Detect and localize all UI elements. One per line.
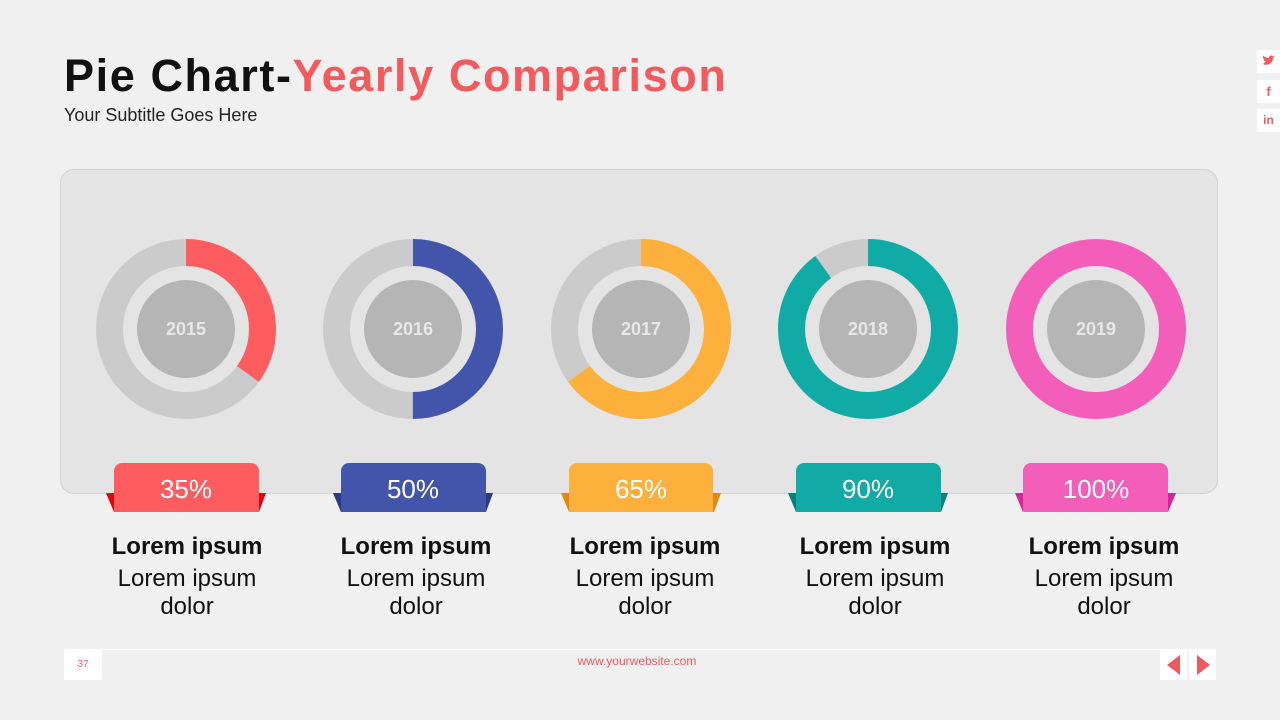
caption 2: dolor — [389, 593, 443, 620]
icon: facebook: f — [1266, 84, 1271, 99]
label 90% — [788, 463, 948, 512]
donut 2018: 2018 — [848, 319, 888, 339]
caption 4: Lorem ipsum — [800, 533, 950, 560]
caption 3: dolor — [618, 593, 672, 620]
nav arrows — [1160, 650, 1216, 680]
donut 2017: 2017 — [621, 319, 661, 339]
label 50% — [333, 463, 493, 512]
panel background — [60, 169, 1218, 494]
caption 4: dolor — [848, 593, 902, 620]
icon: linkedin: in — [1263, 113, 1274, 127]
donut 2019: 2019 — [1076, 319, 1116, 339]
caption 4 — [800, 533, 950, 620]
caption 1: Lorem ipsum — [112, 533, 262, 560]
caption 5: dolor — [1077, 593, 1131, 620]
label 35%: 35% — [160, 474, 212, 504]
caption 1 — [112, 533, 262, 620]
caption 4: Lorem ipsum — [806, 565, 944, 592]
icon: twitter — [1257, 50, 1280, 73]
label 100% — [1015, 463, 1176, 512]
caption 2 — [341, 533, 491, 620]
caption 5 — [1029, 533, 1179, 620]
caption 3 — [570, 533, 720, 620]
footer website: www.yourwebsite.com — [578, 654, 696, 668]
page number — [64, 650, 102, 680]
caption 2: Lorem ipsum — [341, 533, 491, 560]
caption 5: Lorem ipsum — [1035, 565, 1173, 592]
donut 2018 — [792, 252, 944, 406]
icon: linkedin — [1257, 109, 1280, 132]
caption 3: Lorem ipsum — [570, 533, 720, 560]
caption 1: dolor — [160, 593, 214, 620]
page number: 37 — [77, 659, 89, 670]
icon: facebook — [1257, 80, 1280, 103]
donut 2017 — [564, 252, 718, 406]
caption 1: Lorem ipsum — [118, 565, 256, 592]
label 65%: 65% — [615, 474, 667, 504]
donut 2015: 2015 — [166, 319, 206, 339]
caption 5: Lorem ipsum — [1029, 533, 1179, 560]
label 65% — [561, 463, 721, 512]
subtitle: Your Subtitle Goes Here — [64, 105, 257, 125]
donut 2016 — [336, 252, 490, 406]
label 35% — [106, 463, 266, 512]
label 100%: 100% — [1063, 474, 1129, 504]
label 90%: 90% — [842, 474, 894, 504]
title: Pie Chart-Yearly Comparison — [64, 50, 727, 101]
donut 2019 — [1020, 252, 1172, 406]
label 50%: 50% — [387, 474, 439, 504]
donut 2015 — [110, 252, 262, 406]
donut 2016: 2016 — [393, 319, 433, 339]
caption 3: Lorem ipsum — [576, 565, 714, 592]
caption 2: Lorem ipsum — [347, 565, 485, 592]
